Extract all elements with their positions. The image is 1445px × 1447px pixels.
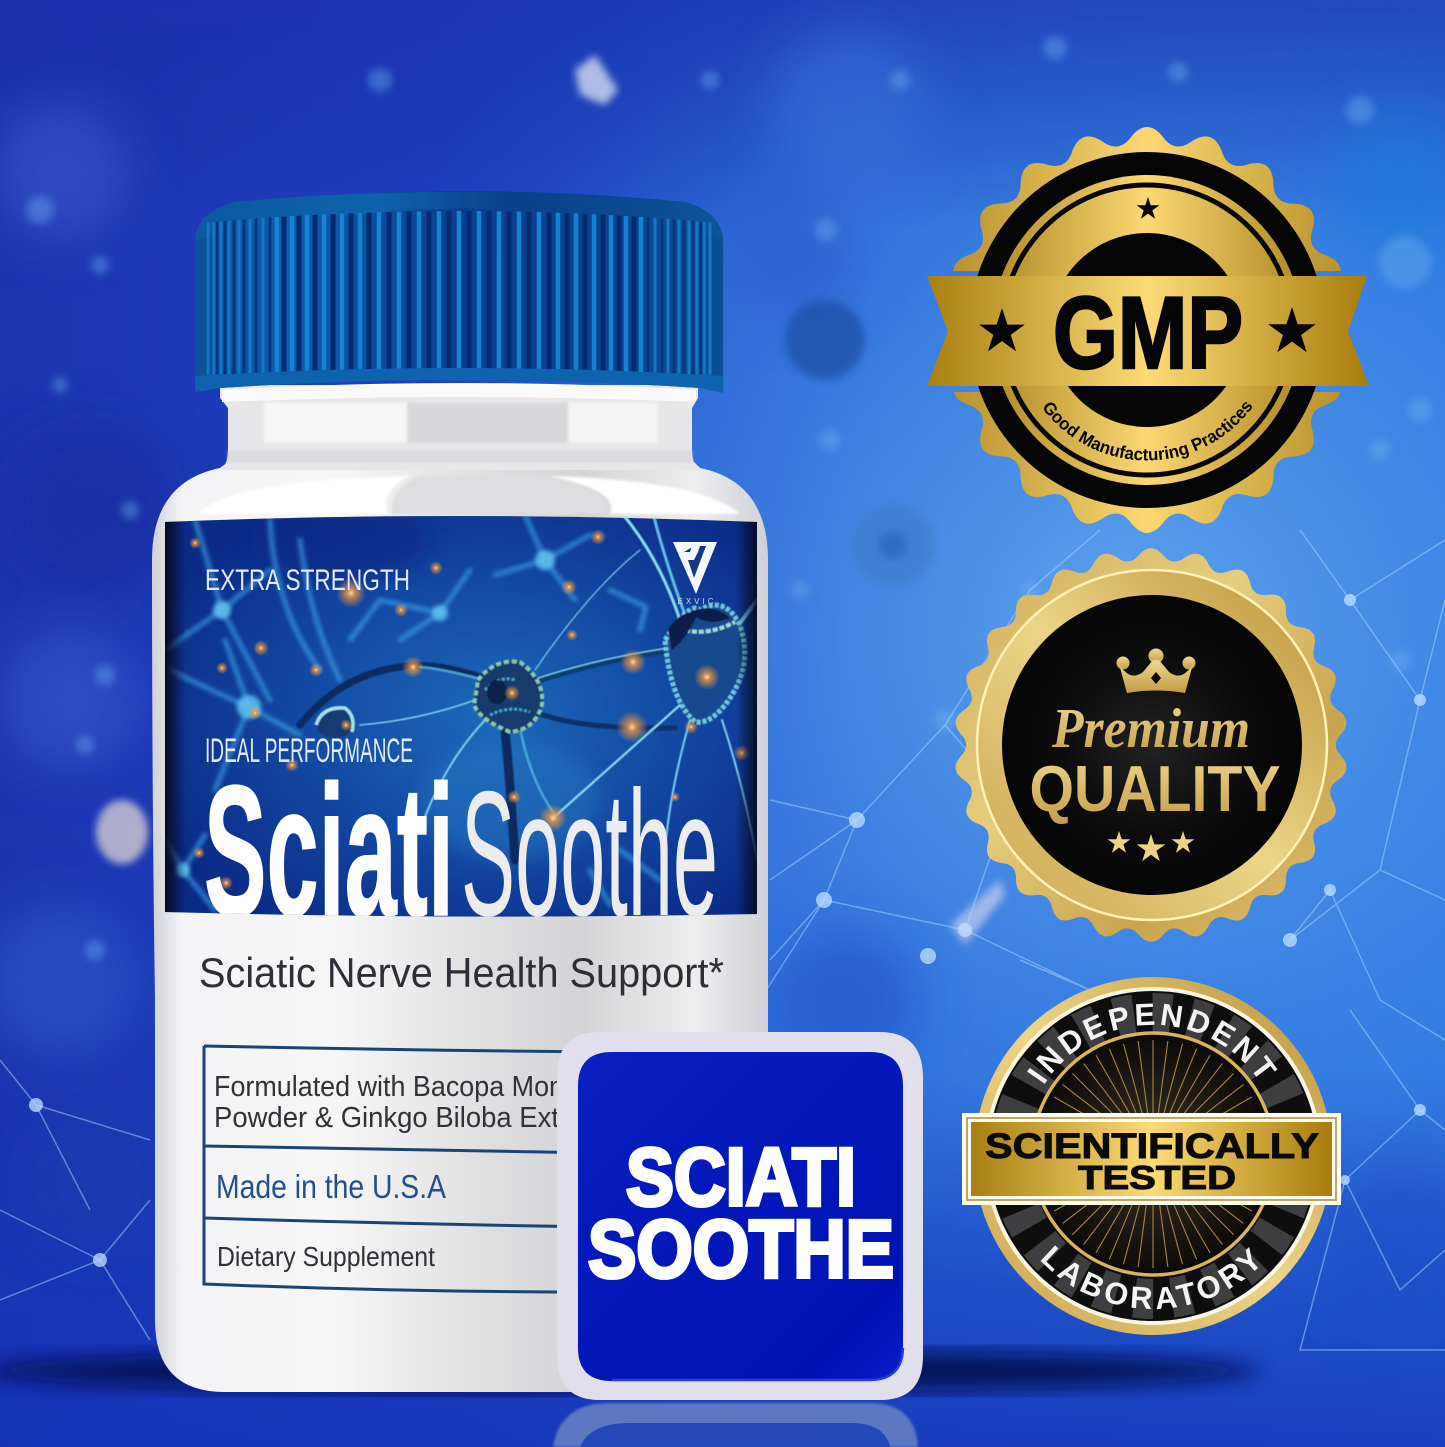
dietary supplement text: Dietary Supplement <box>217 1241 435 1272</box>
quality text: QUALITY <box>1030 752 1280 825</box>
laboratory arc text: LABORATORY <box>1040 1245 1258 1310</box>
crown <box>1116 648 1196 693</box>
reflection under tile <box>553 1403 918 1447</box>
bottle <box>152 190 768 1392</box>
bright ribs <box>274 211 644 372</box>
scalloped gold seal <box>945 540 1357 952</box>
shoulder highlights <box>198 476 740 514</box>
gold banner <box>962 1113 1341 1205</box>
app tile logo <box>557 1032 923 1400</box>
badge: GMP <box>927 127 1369 533</box>
product name on label: Sciati <box>204 748 454 955</box>
background neurons <box>165 515 660 910</box>
premium text: Premium <box>1051 698 1250 760</box>
info box <box>204 1046 600 1292</box>
app tile logo: SOOTHE <box>588 1204 894 1295</box>
GMP text: GMP <box>1053 276 1243 390</box>
badge: premium quality <box>945 540 1357 952</box>
floor shadow <box>0 1349 1260 1393</box>
info box: Powder & Ginkgo Biloba Ext <box>214 1102 559 1134</box>
made in usa text: Made in the U.S.A <box>216 1168 446 1205</box>
brand logo mark <box>673 542 717 606</box>
badge: scientifically tested <box>962 977 1341 1335</box>
small neuron <box>316 708 354 738</box>
right neuron body <box>665 605 745 722</box>
brand logo mark: EXVIC <box>677 597 717 606</box>
scalloped gold seal <box>953 127 1341 533</box>
bottle label artwork <box>165 516 757 917</box>
bottle neck <box>198 383 740 514</box>
bottle label artwork: Soothe <box>461 754 718 953</box>
ingredients text: Formulated with Bacopa Mon <box>214 1071 564 1103</box>
tile text: SCIATI <box>626 1132 856 1223</box>
bottle body <box>152 462 768 1392</box>
three stars <box>1108 831 1194 861</box>
tagline: Sciatic Nerve Health Support* <box>199 949 724 996</box>
good manufacturing practices text: Good Manufacturing Practices <box>1044 402 1252 461</box>
glowing synapses <box>189 529 750 890</box>
ribbon stars <box>979 308 1025 351</box>
star <box>1137 197 1159 219</box>
central neuron body <box>474 661 542 732</box>
ideal performance text: IDEAL PERFORMANCE <box>205 732 413 770</box>
extra strength text: EXTRA STRENGTH <box>205 564 410 597</box>
dark grooves <box>282 211 636 372</box>
independent arc text: INDEPENDENT <box>1027 1004 1278 1084</box>
tested text: TESTED <box>1078 1159 1236 1196</box>
ribbon <box>927 276 1369 386</box>
bottle cap <box>195 190 723 393</box>
scientifically text: SCIENTIFICALLY <box>985 1127 1319 1166</box>
foreground neurons <box>300 517 757 860</box>
